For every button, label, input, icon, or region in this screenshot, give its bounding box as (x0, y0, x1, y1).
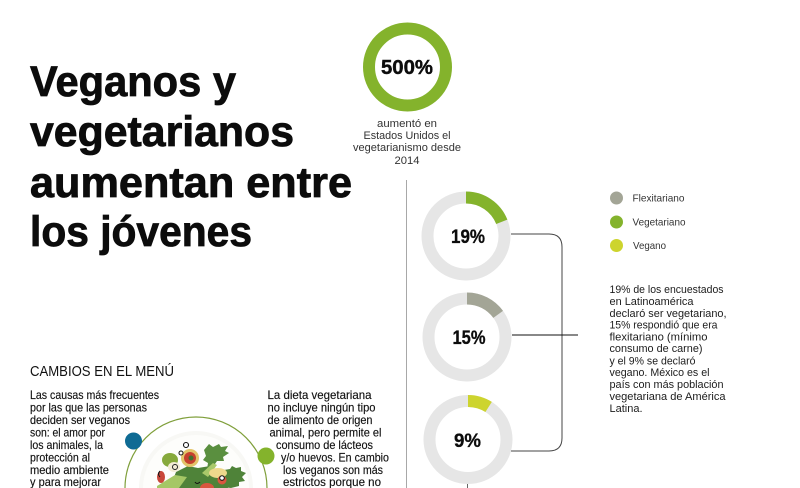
vertical divider (406, 180, 408, 488)
survey text block (610, 284, 726, 415)
title: Veganos y (30, 58, 236, 106)
right text block: consumo de lácteos (276, 438, 373, 452)
stat ring: 500% (369, 28, 446, 106)
plate with salad (125, 417, 267, 488)
survey text block: consumo de carne) (610, 343, 703, 355)
right text block: y/o huevos. En cambio (281, 450, 389, 464)
stat ring: 500%: 500% (381, 57, 433, 79)
left text block (30, 388, 159, 488)
title (30, 58, 352, 256)
section heading: CAMBIOS EN EL MENÚ (30, 363, 174, 380)
left text block: los animales, la (30, 438, 103, 452)
survey text block: 15% respondió que era (610, 320, 718, 332)
stat caption (353, 118, 461, 167)
left text block: medio ambiente (30, 463, 109, 477)
title: aumentan entre (30, 159, 352, 207)
title: los jóvenes (30, 208, 252, 256)
right text block: los veganos son más (283, 463, 383, 477)
survey text block: declaró ser vegetariano, (610, 308, 726, 320)
donut: 15% flexitariano: 15% (452, 328, 486, 349)
connector bracket (468, 234, 578, 488)
dot: green marker (258, 448, 274, 464)
left text block: deciden ser veganos (30, 413, 130, 427)
right text block: La dieta vegetariana (268, 388, 372, 402)
stat caption: vegetarianismo desde (353, 142, 461, 154)
right text block: animal, pero permite el (270, 426, 382, 440)
survey text block: Latina. (610, 403, 642, 415)
survey text block: y el 9% se declaró (610, 356, 696, 368)
right text block (268, 388, 389, 488)
survey text block: flexitariano (mínimo (610, 332, 708, 344)
stat caption: 2014 (394, 155, 420, 167)
survey text block: país con más población (610, 379, 724, 391)
plate (125, 417, 267, 488)
donut: 19% vegetariano (428, 198, 504, 274)
right text block: de alimento de origen (268, 413, 372, 427)
left text block: protección al (30, 450, 90, 464)
donut: 15% flexitariano (428, 298, 506, 376)
left text block: son: el amor por (30, 426, 105, 440)
left text block: Las causas más frecuentes (30, 388, 159, 402)
survey text block: vegano. México es el (610, 367, 710, 379)
legend item: vegetariano: Vegetariano (632, 216, 686, 228)
legend item: vegano: Vegano (633, 240, 666, 252)
survey text block: 19% de los encuestados (610, 284, 724, 296)
survey text block: vegetariana de América (610, 391, 726, 403)
donut: 9% vegano (430, 401, 506, 478)
stat caption: Estados Unidos el (364, 130, 450, 142)
salad (157, 442, 246, 488)
legend (610, 192, 686, 252)
legend item: flexitariano: Flexitariano (632, 192, 685, 204)
donut: 9% vegano: 9% (454, 431, 481, 452)
survey text block: en Latinoamérica (610, 296, 694, 308)
stat caption: aumentó en (377, 118, 437, 130)
dot: blue marker (125, 432, 142, 450)
left text block: por las que las personas (30, 400, 147, 414)
right text block: no incluye ningún tipo (268, 400, 376, 414)
title: vegetarianos (30, 108, 294, 156)
donut: 19% vegetariano: 19% (451, 227, 485, 248)
